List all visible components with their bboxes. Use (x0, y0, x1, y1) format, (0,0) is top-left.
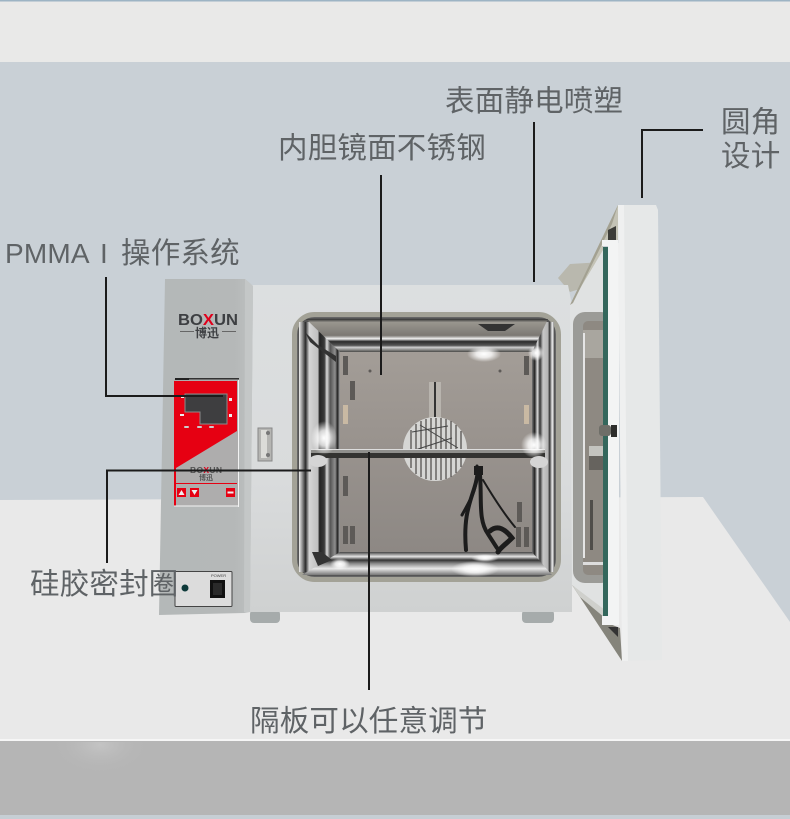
reflected cable (462, 466, 515, 552)
brand logo: BOXUN (178, 312, 238, 329)
door interior reflection (583, 321, 608, 575)
label: adjustable shelf: 隔板可以任意调节 (250, 705, 488, 738)
leader: coating (533, 122, 535, 282)
right chrome walls (532, 322, 554, 572)
corner reflections (305, 324, 515, 566)
leader: liner (380, 175, 382, 375)
oven feet (250, 610, 554, 623)
power box: POWER (211, 573, 226, 578)
open door (570, 205, 662, 661)
table front edge (0, 739, 790, 815)
leader: PMMA (106, 277, 223, 396)
top hinge wedge (570, 205, 618, 305)
label: PMMA control system: I (100, 238, 108, 269)
label: PMMA control system: PMMA (5, 238, 90, 269)
oven (159, 205, 662, 661)
door front (618, 205, 662, 661)
door gasket (573, 312, 613, 583)
oven body (244, 285, 572, 612)
left chrome walls (299, 322, 340, 572)
fan sensor bracket (429, 382, 441, 418)
door inner panel (570, 250, 603, 622)
label: rounded corner design (721, 106, 780, 173)
panel logo: BOXUN (190, 465, 222, 475)
back wall (340, 350, 532, 553)
label: silicone seal: 硅胶密封圈 (30, 568, 179, 601)
white door strip (608, 243, 619, 625)
fan (403, 417, 467, 481)
highlights (309, 345, 548, 577)
white table surface (0, 497, 790, 740)
label: rounded corner design: 设计 (721, 140, 780, 173)
label: mirror stainless liner: 内胆镜面不锈钢 (278, 132, 486, 165)
temperature display (185, 394, 227, 424)
wall vents (343, 356, 529, 547)
bottom hinge (572, 585, 622, 661)
label: surface coating: 表面静电喷塑 (445, 85, 623, 118)
leader: silicone seal (107, 470, 311, 563)
leader: rounded corner (642, 130, 703, 198)
brand logo: 博迅 (195, 325, 219, 340)
left front column (159, 279, 253, 615)
leader: shelf (368, 452, 370, 690)
hinge latch (258, 428, 272, 461)
power box (175, 572, 232, 606)
brand logo (178, 312, 238, 340)
control panel (174, 378, 239, 507)
door latch (599, 425, 617, 437)
top chrome (306, 319, 548, 352)
top band (0, 0, 790, 62)
chamber gasket (294, 314, 558, 580)
label: PMMA control system: 操作系统 (121, 237, 240, 270)
panel buttons (177, 488, 235, 497)
label: rounded corner design: 圆角 (721, 106, 780, 139)
glass edge (603, 247, 608, 617)
mirror chamber (298, 318, 555, 577)
red panel area (174, 381, 237, 506)
control panel: 博迅 (199, 473, 213, 482)
callout lines (106, 122, 703, 690)
hinge behind door (558, 262, 603, 292)
bottom chrome (302, 552, 552, 575)
shelf (311, 449, 545, 458)
